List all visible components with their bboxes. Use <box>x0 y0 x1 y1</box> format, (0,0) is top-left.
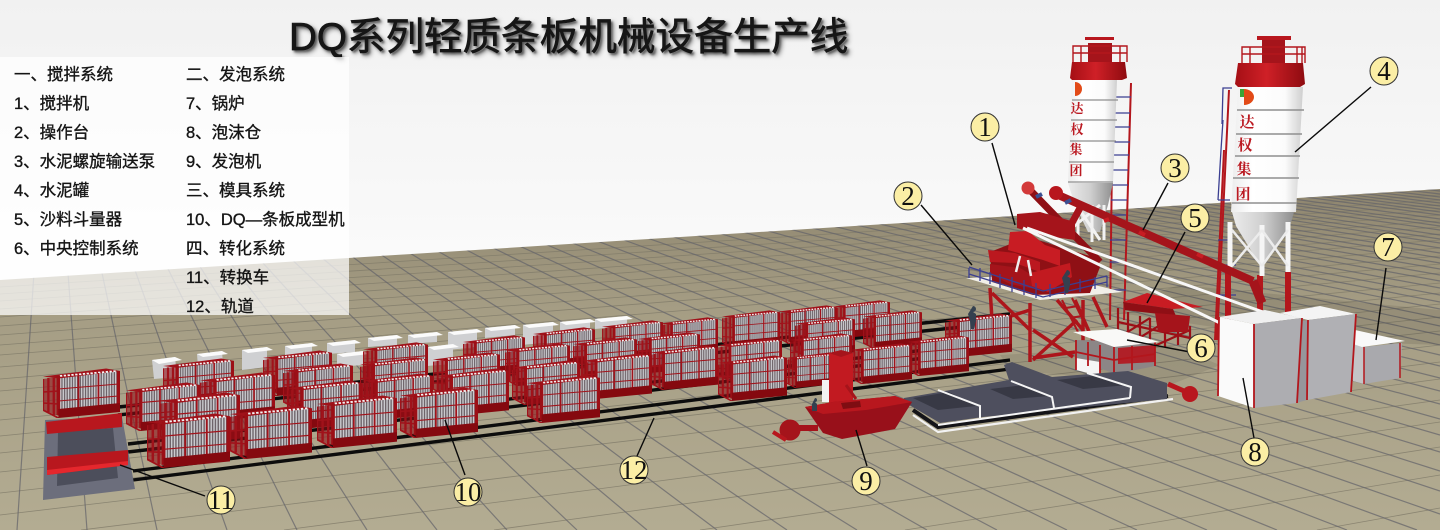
callout 3 <box>1161 153 1189 183</box>
callout 2 <box>894 181 922 211</box>
back wall <box>0 0 1440 285</box>
left silo <box>1068 37 1131 320</box>
callout 4 <box>1370 56 1398 86</box>
legend column: foaming, mould and transfer systems: 11、转换车 <box>186 269 269 287</box>
legend column: mixing system: 5、沙料斗量器 <box>14 211 122 229</box>
callout 12: 12 <box>620 455 648 485</box>
callout 10: 10 <box>454 477 482 507</box>
4 right silo: 团 <box>1235 183 1251 204</box>
legend column: mixing system: 3、水泥螺旋输送泵 <box>14 153 155 171</box>
legend column: foaming, mould and transfer systems: 12、轨道 <box>186 298 254 316</box>
1 mixer machine <box>969 212 1107 298</box>
12 rails <box>118 314 1010 480</box>
legend column: foaming, mould and transfer systems: 8、泡沫仓 <box>186 124 261 142</box>
left silo: 团 <box>1069 160 1083 179</box>
tower support legs <box>990 288 1107 362</box>
legend column: mixing system: 2、操作台 <box>14 124 89 142</box>
left silo: 集 <box>1069 139 1083 158</box>
left silo: 达 <box>1070 98 1084 117</box>
callout 6 <box>1187 333 1215 363</box>
callout 5: 5 <box>1188 203 1202 233</box>
forming moulds <box>126 300 1012 468</box>
left silo: 权 <box>1070 119 1084 138</box>
legend column: foaming, mould and transfer systems: 10、DQ—条板成型机 <box>186 211 345 229</box>
worker on platform <box>1062 270 1070 293</box>
legend column: mixing system: 4、水泥罐 <box>14 182 89 200</box>
legend column: mixing system: 1、搅拌机 <box>14 95 89 113</box>
7 boiler house <box>1353 330 1405 384</box>
callout 2: 2 <box>901 181 915 211</box>
tiled floor <box>0 189 1440 530</box>
legend column: mixing system <box>14 66 155 258</box>
legend panel <box>0 57 349 315</box>
callout 1: 1 <box>978 112 992 142</box>
legend column: foaming, mould and transfer systems: 四、转化系统 <box>186 240 285 258</box>
worker on mould <box>968 306 976 329</box>
callout 7 <box>1374 232 1402 262</box>
foam channels <box>904 362 1198 432</box>
11 transfer pit and cars <box>43 368 135 500</box>
4 right silo: 集 <box>1236 158 1252 179</box>
5 sand hopper batcher <box>1118 293 1203 348</box>
9 foam machine <box>773 350 912 440</box>
legend column: mixing system: 6、中央控制系统 <box>14 240 139 258</box>
number callouts <box>207 56 1402 515</box>
4 right silo <box>1215 36 1305 340</box>
legend column: mixing system: 一、搅拌系统 <box>14 66 113 84</box>
4 right silo: 权 <box>1237 134 1253 155</box>
legend column: foaming, mould and transfer systems: 三、模具系统 <box>186 182 285 200</box>
legend column: foaming, mould and transfer systems: 二、发泡系统 <box>186 66 285 84</box>
4 right silo: 达 <box>1239 111 1255 132</box>
callout 1 <box>971 112 999 142</box>
leader lines <box>120 87 1386 496</box>
6 central control room <box>1073 329 1159 376</box>
callout 6: 6 <box>1194 333 1208 363</box>
title: DQ系列轻质条板机械设备生产线 <box>289 16 848 59</box>
legend column: foaming, mould and transfer systems: 7、锅炉 <box>186 95 245 113</box>
callout 9 <box>852 466 880 496</box>
callout 5 <box>1181 203 1209 233</box>
callout 8: 8 <box>1248 437 1262 467</box>
callout 7: 7 <box>1381 232 1395 262</box>
3 screw conveyors <box>1022 182 1262 303</box>
callout 3: 3 <box>1168 153 1182 183</box>
callout 11: 11 <box>208 485 234 515</box>
callout 8 <box>1241 437 1269 467</box>
white finished board stacks <box>152 316 633 379</box>
legend column: foaming, mould and transfer systems <box>186 66 345 316</box>
legend column: foaming, mould and transfer systems: 9、发泡机 <box>186 153 261 171</box>
2 operating platform <box>966 274 1123 300</box>
callout 4: 4 <box>1377 56 1391 86</box>
8 foam storage bins <box>1218 306 1356 408</box>
callout 9: 9 <box>859 466 873 496</box>
white discharge pipes <box>1023 228 1263 323</box>
